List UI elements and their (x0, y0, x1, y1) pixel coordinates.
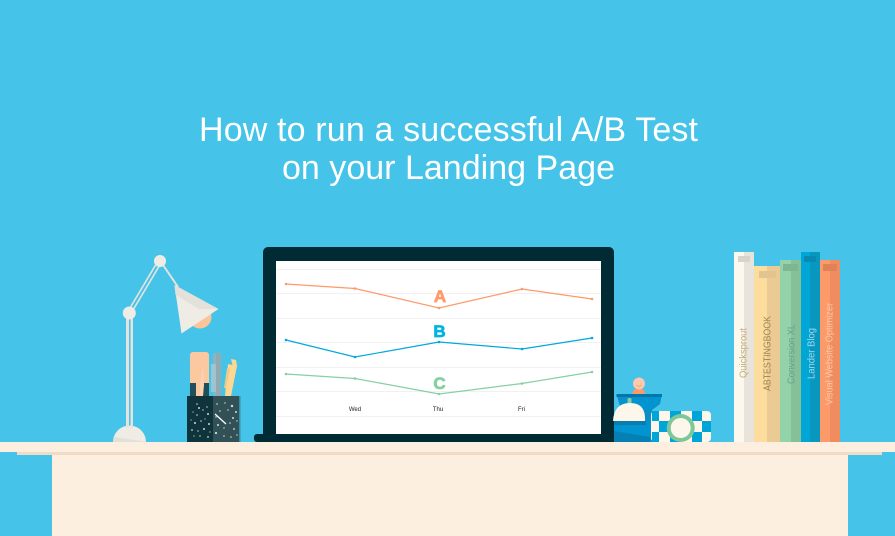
lamp base (113, 426, 146, 442)
book: ABTESTINGBOOK (754, 266, 780, 442)
books (734, 252, 840, 442)
pen cup (187, 352, 240, 442)
figure (632, 378, 645, 395)
washi tape roll (651, 411, 711, 442)
book: ABTESTINGBOOK: ABTESTINGBOOK (762, 316, 774, 391)
laptop base (254, 434, 619, 442)
book: Visual Website Optimizer: Visual Website Optimizer (824, 302, 836, 405)
cup speckles (190, 402, 238, 438)
upper bowl (616, 394, 662, 442)
book: Quicksprout (734, 252, 754, 442)
book: Conversion XL: Conversion XL (786, 324, 798, 384)
toy figure on bowl (613, 378, 662, 442)
line A (285, 283, 593, 309)
title: on your Landing Page (282, 149, 615, 187)
line C (285, 371, 593, 395)
lamp pole (126, 316, 133, 428)
tape centre ring (667, 414, 695, 442)
line B (285, 337, 593, 358)
desk lamp (113, 255, 218, 442)
book: Lander Blog (801, 252, 820, 442)
lamp arm (130, 261, 178, 310)
laptop frame (263, 247, 614, 442)
lamp joints (123, 255, 166, 320)
axis labels (349, 407, 525, 413)
series labels: B (433, 322, 446, 341)
axis labels: Fri (518, 407, 525, 413)
series labels (433, 287, 446, 393)
laptop screen (276, 261, 601, 434)
peach marker (190, 352, 209, 396)
axis labels: Thu (433, 407, 443, 413)
axis labels: Wed (349, 407, 361, 413)
chart (276, 270, 601, 416)
lamp bulb (188, 306, 212, 328)
bell tray (614, 421, 650, 442)
cup body (187, 396, 240, 442)
title: How to run a successful A/B Test (199, 111, 699, 149)
shooting star (215, 414, 226, 424)
laptop (254, 247, 619, 442)
yellow pen (224, 359, 237, 396)
book: Lander Blog: Lander Blog (806, 328, 818, 379)
grey pen (211, 353, 221, 396)
book: Conversion XL (780, 260, 801, 442)
series labels: A (434, 287, 446, 306)
title (199, 111, 699, 187)
series labels: C (433, 374, 446, 393)
bell dome (613, 398, 645, 421)
book: Visual Website Optimizer (820, 260, 840, 442)
desk (0, 442, 895, 536)
lamp shade (174, 285, 218, 334)
book: Quicksprout: Quicksprout (738, 328, 750, 378)
